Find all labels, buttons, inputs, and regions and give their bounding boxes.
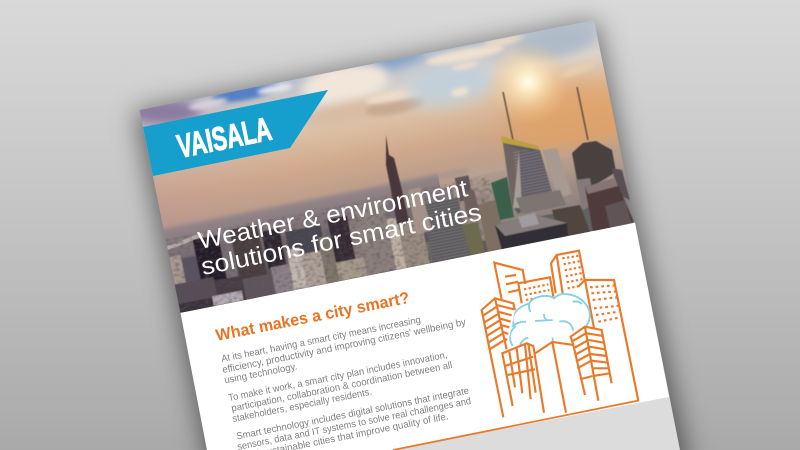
right slatted building [571,327,612,401]
back left building [494,263,525,299]
Empire State Building [386,135,409,224]
page shadow [135,22,690,450]
clouds and blue sky [140,28,595,126]
Bank of America tower [501,92,552,215]
centre building [533,342,585,413]
brochure page [129,20,680,450]
right tall building [578,280,638,401]
distant city base [164,134,630,313]
section heading: What makes a city smart? [214,289,411,345]
page grey footer [180,223,680,450]
back middle building [518,277,553,303]
paragraph 2: participation, collaboration & coordination between all [230,360,453,414]
banner [143,90,328,176]
paragraph 1: using technology. [223,361,298,386]
illustration: smart city buildings with brain cloud [482,251,638,417]
back tall building [551,251,585,293]
headline: solutions for smart cities [199,199,484,281]
window texture [165,175,504,314]
lower left grid building [502,343,544,413]
brain cloud [510,294,590,350]
footer rule [393,400,639,450]
pale tower [542,148,572,198]
paragraph 3: Smart technology includes digital solutions that integrate [235,386,471,442]
headline [196,175,484,281]
paragraph 2: stakeholders, especially residents. [231,387,373,425]
left slatted building [482,298,515,417]
filler buildings [164,172,500,314]
sky [140,20,620,238]
red-brown building [585,178,634,232]
paragraph 1: At its heart, having a smart city means increasing [220,315,422,365]
low flat buildings [495,190,590,250]
right tower with spire [572,87,630,210]
mid-distance towers [408,187,510,266]
orange glow [498,66,623,163]
paragraph 2: To make it work, a smart city plan includes innovation, [227,350,448,404]
green tower [491,177,514,220]
body text [220,315,472,450]
paragraph 1: efficiency, productivity and improving citizens' wellbeing by [221,317,467,376]
sun [490,44,560,116]
photo: city skyline at sunset [140,20,634,313]
page white body [180,223,669,450]
headline: Weather & environment [196,175,470,255]
logo: VAISALA: VAISALA [174,110,275,165]
